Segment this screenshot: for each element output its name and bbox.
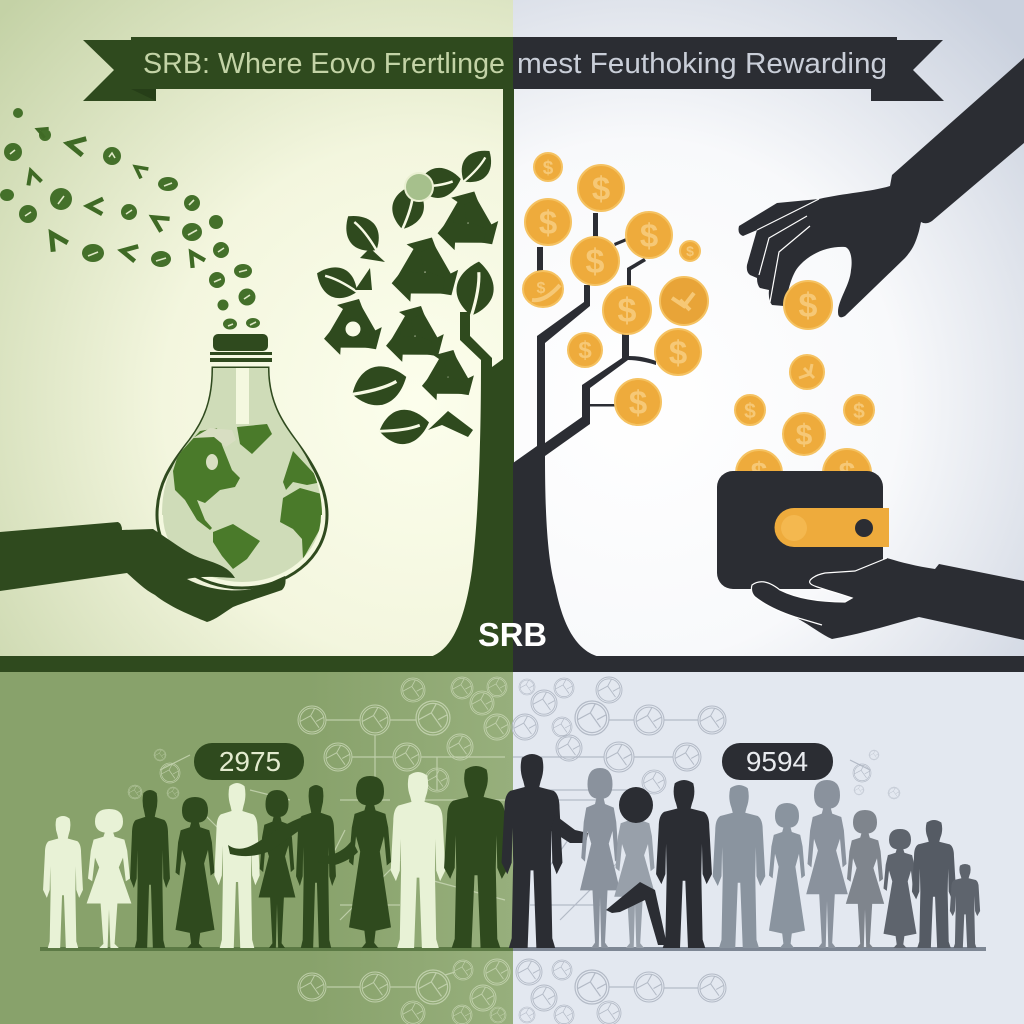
person 18 — [846, 810, 884, 948]
coins on tree: $ — [640, 217, 658, 254]
network lines green side — [128, 677, 510, 1024]
icon: right lower hand holding wallet — [751, 558, 1024, 640]
wallet strap — [774, 508, 889, 547]
person 4 — [176, 797, 214, 948]
person 12 — [580, 768, 620, 948]
person 2 — [87, 809, 131, 948]
panel: community green background — [0, 670, 513, 1024]
person 5 — [214, 783, 260, 948]
falling coins — [734, 354, 875, 472]
pill: 9594: 9594 — [746, 746, 808, 777]
coins on tree: $ — [618, 292, 637, 330]
person 10 — [444, 766, 508, 948]
label: SRB: SRB — [478, 616, 547, 653]
person 14 — [656, 780, 712, 948]
banner ribbon — [83, 37, 944, 101]
falling coins: $ — [853, 400, 865, 423]
coins on tree: $ — [539, 204, 557, 241]
people: grey group — [502, 754, 980, 948]
pill: 9594 — [722, 743, 833, 780]
pill: 2975: 2975 — [219, 746, 281, 777]
left tree trunk — [430, 89, 514, 657]
floor line — [40, 947, 986, 951]
person 20 — [912, 820, 956, 948]
coin in hand: $ — [799, 287, 818, 325]
person 15 — [713, 785, 765, 948]
right tree trunk and branches — [513, 213, 656, 657]
pill: 2975 — [194, 743, 304, 780]
coins on tree: $ — [537, 280, 546, 297]
recycle leaves crown — [311, 142, 508, 448]
icon: wallet — [717, 471, 889, 589]
coins on tree: $ — [578, 337, 592, 364]
person 7 — [296, 785, 336, 948]
falling coins: $ — [839, 457, 856, 490]
person 19 — [884, 829, 916, 948]
coins on tree: $ — [686, 243, 694, 259]
people: green group — [43, 766, 508, 948]
falling coins: $ — [744, 400, 756, 423]
bottle cap — [210, 334, 272, 362]
coins on tree: $ — [586, 243, 605, 281]
person 6 — [228, 790, 300, 948]
coins on tree: $ — [543, 158, 554, 179]
person 17 — [806, 780, 848, 948]
person 21 — [950, 864, 980, 948]
band: horizontal divider — [0, 656, 1024, 672]
falling coins: $ — [751, 457, 768, 490]
network lines grey side — [512, 677, 900, 1024]
title text: SRB: Where Eovo Frertlinge — [143, 48, 505, 80]
panel: community grey background — [513, 670, 1024, 1024]
coins on tree: $ — [592, 170, 610, 207]
coins on tree: $ — [669, 334, 687, 371]
icon: globe in light bulb bottle — [150, 334, 330, 600]
person 8 — [318, 776, 391, 948]
falling coins: $ — [796, 419, 813, 452]
coins on tree — [523, 153, 708, 425]
stream of eco particles — [0, 108, 260, 330]
coin in hand — [784, 281, 832, 329]
banner ribbon: mest Feuthoking Rewarding — [517, 48, 887, 80]
icon: left hand holding globe — [0, 522, 286, 622]
icon: right upper hand dropping coin — [738, 58, 1024, 329]
person 1 — [43, 816, 83, 948]
person 11 — [502, 754, 588, 948]
panel: money background — [513, 0, 1024, 660]
person 16 — [769, 803, 805, 948]
person 13 — [606, 787, 667, 948]
panel: green background — [0, 0, 513, 660]
person 9 — [391, 772, 445, 948]
person 3 — [130, 790, 170, 948]
coins on tree: $ — [629, 384, 647, 421]
